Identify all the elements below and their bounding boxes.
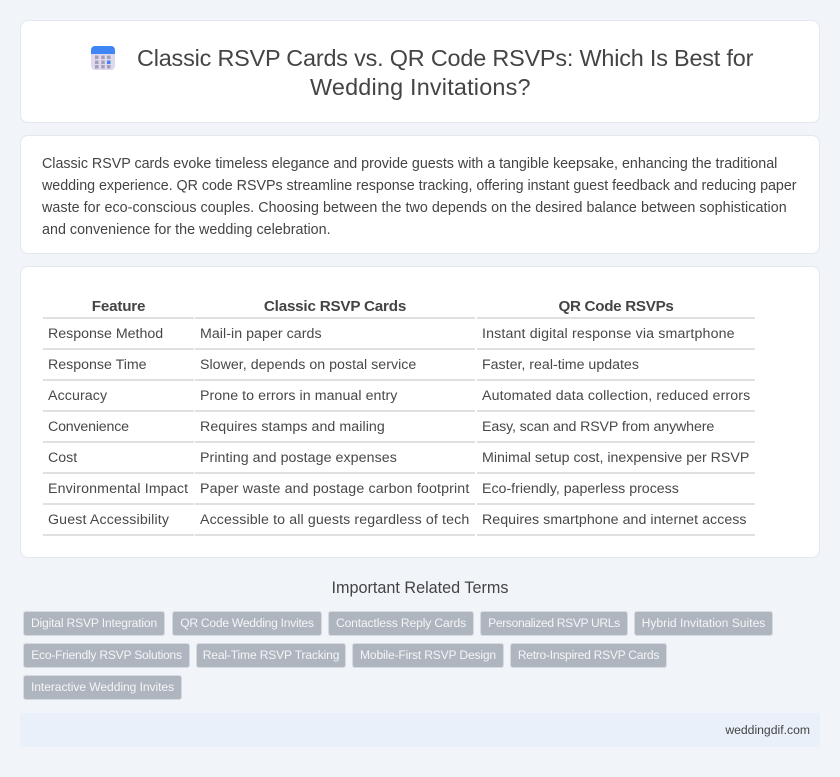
text: Response Time — [48, 357, 147, 373]
tag: Contactless Reply Cards: Contactless Reply Cards — [336, 616, 466, 630]
text: Prone to errors in manual entry — [200, 388, 397, 404]
text: Convenience — [48, 419, 129, 435]
tag: Hybrid Invitation Suites: Hybrid Invitation Suites — [642, 616, 765, 630]
title: Wedding Invitations? — [310, 74, 531, 100]
text: Requires stamps and mailing — [200, 419, 385, 435]
icon: calendar — [91, 46, 115, 70]
footer bar — [20, 713, 820, 747]
text: Printing and postage expenses — [200, 450, 397, 466]
text: Accessible to all guests regardless of tech — [200, 512, 469, 528]
text: Mail-in paper cards — [200, 326, 322, 342]
footer source text: weddingdif.com — [725, 723, 810, 737]
tag: Real-Time RSVP Tracking: Real-Time RSVP Tracking — [203, 648, 339, 662]
text: QR Code RSVPs — [558, 298, 674, 315]
table rows: Response Method — [48, 326, 163, 342]
tag: Interactive Wedding Invites — [23, 675, 182, 700]
text: Cost — [48, 450, 77, 466]
text: Requires smartphone and internet access — [482, 512, 747, 528]
text: Faster, real-time updates — [482, 357, 639, 373]
text: Instant digital response via smartphone — [482, 326, 735, 342]
text: Minimal setup cost, inexpensive per RSVP — [482, 450, 749, 466]
text: Slower, depends on postal service — [200, 357, 416, 373]
tag: QR Code Wedding Invites — [172, 611, 322, 636]
tag: Interactive Wedding Invites: Interactive Wedding Invites — [31, 680, 174, 694]
tag: Mobile-First RSVP Design — [352, 643, 504, 668]
intro text: Classic RSVP cards evoke timeless elegance and provide guests with a tangible keepsake, enhancing the traditional — [42, 156, 777, 172]
intro text: wedding experience. QR code RSVPs streamline response tracking, offering instant guest feedback and reducing paper — [42, 178, 796, 194]
tag: QR Code Wedding Invites: QR Code Wedding Invites — [180, 616, 314, 630]
tag: Digital RSVP Integration: Digital RSVP Integration — [31, 616, 157, 630]
tag: Personalized RSVP URLs — [480, 611, 628, 636]
header panel — [20, 20, 820, 123]
intro text: waste for eco-conscious couples. Choosing between the two depends on the desired balance between sophistication — [42, 200, 787, 216]
tag: Mobile-First RSVP Design: Mobile-First RSVP Design — [360, 648, 496, 662]
tag: Real-Time RSVP Tracking — [196, 643, 346, 668]
table headers: Feature — [92, 298, 145, 315]
title — [137, 45, 754, 100]
text: Paper waste and postage carbon footprint — [200, 481, 469, 497]
tag: Retro-Inspired RSVP Cards — [510, 643, 667, 668]
comparison table panel — [20, 266, 820, 558]
tag: Eco-Friendly RSVP Solutions: Eco-Friendly RSVP Solutions — [31, 648, 182, 662]
text: Classic RSVP Cards — [264, 298, 406, 315]
tag: Hybrid Invitation Suites — [634, 611, 773, 636]
text: Automated data collection, reduced errors — [482, 388, 750, 404]
related terms heading: Important Related Terms — [332, 579, 508, 597]
text: Guest Accessibility — [48, 512, 169, 528]
tag: Digital RSVP Integration — [23, 611, 165, 636]
intro text: and convenience for the wedding celebration. — [42, 222, 331, 238]
text: Environmental Impact — [48, 481, 188, 497]
text: Easy, scan and RSVP from anywhere — [482, 419, 714, 435]
tag: Retro-Inspired RSVP Cards: Retro-Inspired RSVP Cards — [518, 648, 659, 662]
intro panel — [20, 135, 820, 254]
text: Eco-friendly, paperless process — [482, 481, 679, 497]
intro text — [42, 156, 796, 238]
tag: Eco-Friendly RSVP Solutions — [23, 643, 190, 668]
text: Accuracy — [48, 388, 107, 404]
title: Classic RSVP Cards vs. QR Code RSVPs: Which Is Best for — [137, 45, 753, 71]
tag: Personalized RSVP URLs: Personalized RSVP URLs — [488, 616, 620, 630]
tag: Contactless Reply Cards — [328, 611, 474, 636]
